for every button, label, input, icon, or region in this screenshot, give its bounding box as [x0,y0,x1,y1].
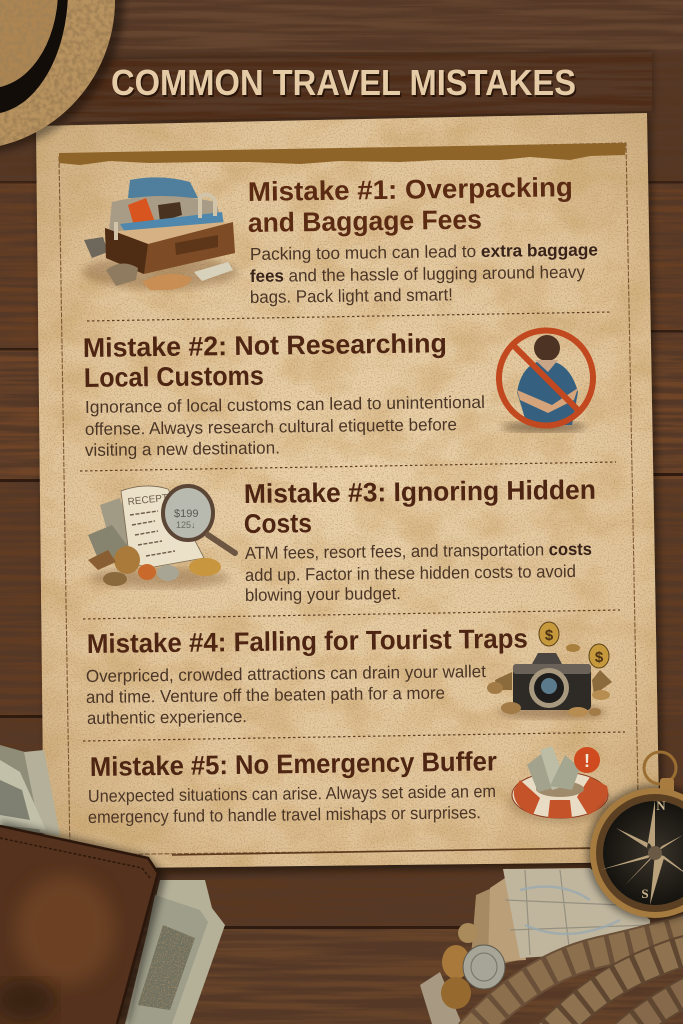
body text: mistake 5: emergency fund to handle travel mishaps or surprises. [88,802,481,827]
prop: map and envelopes [470,868,650,970]
body text: mistake 4: and time. Venture off the beaten path for a more [86,683,445,707]
heading: mistake 2: Local Customs [84,361,264,393]
prop: brass compass: S [641,886,649,901]
heading: mistake 2: Mistake #2: Not Researching [83,328,447,363]
icon: receipt, magnifier and coins: $199 [174,508,198,520]
body text: mistake 2: offense. Always research cultural etiquette before [85,414,457,439]
section: mistake 2 [83,328,593,460]
body text: mistake 5: Unexpected situations can arise. Always set aside an em [88,781,496,806]
icon: receipt, magnifier and coins: 125↓ [176,520,196,530]
body text: mistake 2 [85,392,485,460]
icon: receipt, magnifier and coins: RECEPT [127,493,169,508]
title text: COMMON TRAVEL MISTAKES [111,62,576,103]
prop: coiled rope [470,925,683,1024]
section: mistake 4 [86,622,612,728]
body text: mistake 3: ATM fees, resort fees, and transportation costs [245,539,592,563]
prop: leather wallet [0,820,166,1024]
body text: mistake 3: blowing your budget. [245,583,401,605]
heading: mistake 1: Mistake #1: Overpacking [248,172,573,207]
icon: overpacked suitcase [82,177,238,290]
prop: banknotes behind wallet [0,745,225,1024]
heading: mistake 5: Mistake #5: No Emergency Buffer [90,746,498,782]
divider 4 [83,732,625,741]
body text: mistake 3 [245,539,592,605]
body text: mistake 3: add up. Factor in these hidden costs to avoid [245,561,576,585]
section: mistake 5 [88,746,612,827]
title plank [66,52,660,124]
body text: mistake 1: Packing too much can lead to extra baggage [250,239,598,264]
heading: mistake 3: Mistake #3: Ignoring Hidden [244,475,596,509]
prop: brass compass [587,752,683,921]
icon: receipt, magnifier and coins [88,486,235,588]
body text: mistake 1: bags. Pack light and smart! [250,284,453,307]
prop: coins [420,923,505,1024]
section: mistake 1 [82,172,598,307]
heading: mistake 1 [248,172,573,238]
body text: mistake 4: Overpriced, crowded attractions can drain your wallet [86,661,486,686]
heading: mistake 3: Costs [244,508,312,539]
prop: brass compass: N [656,798,666,813]
icon: camera and coins [487,622,612,719]
icon: life ring with cash: ! [584,751,590,771]
divider 3 [83,610,620,619]
icon: camera and coins: $ [595,649,604,666]
body text: mistake 2: visiting a new destination. [85,437,280,460]
body text: mistake 4: authentic experience. [87,706,247,728]
torn brown band [59,143,626,165]
body text: mistake 5 [88,781,496,827]
body text: mistake 4 [86,661,486,728]
icon: camera and coins: $ [545,627,554,644]
heading: mistake 3 [244,475,596,539]
icon: life ring with cash [508,746,612,823]
icon: prohibited tourist [499,330,593,432]
section: mistake 3 [88,475,596,605]
heading: mistake 4: Mistake #4: Falling for Tourist Traps [87,624,528,659]
heading: mistake 1: and Baggage Fees [248,205,482,238]
parchment panel [36,113,664,876]
title text: COMMON TRAVEL MISTAKES [112,64,578,105]
body text: mistake 2: Ignorance of local customs can lead to unintentional [85,392,485,417]
body text: mistake 1 [250,239,598,307]
divider 2 [80,462,616,471]
body text: mistake 1: fees and the hassle of lugging around heavy [250,262,585,286]
heading: mistake 2 [83,328,447,393]
prop: straw hat [0,0,124,154]
divider 1 [87,312,612,321]
